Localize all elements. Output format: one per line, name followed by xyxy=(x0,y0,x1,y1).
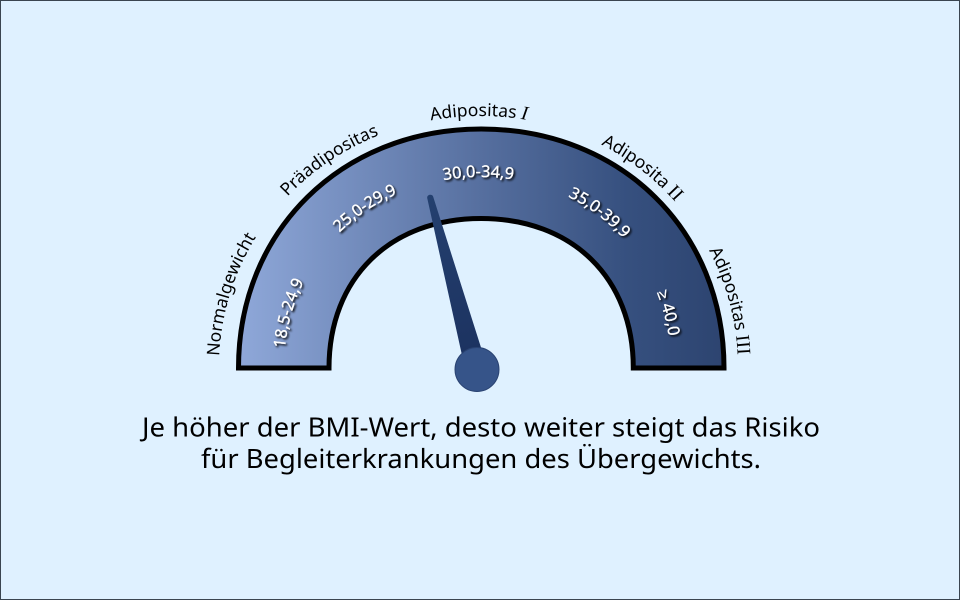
gauge needle xyxy=(427,195,482,353)
range: ≥ 40,0: ≥ 40,0 xyxy=(656,289,682,338)
label: Adiposita II: Adiposita II xyxy=(601,136,684,202)
needle hub xyxy=(455,348,499,392)
range: 30,0-34,9: 30,0-34,9 xyxy=(442,165,516,183)
range: 35,0-39,9: 35,0-39,9 xyxy=(568,187,633,239)
BMI range labels xyxy=(274,165,682,349)
label: Adipositas III: Adipositas III xyxy=(709,249,750,354)
caption line 1: Je höher der BMI-Wert, desto weiter steigt das Risiko xyxy=(139,408,820,444)
caption xyxy=(139,408,820,476)
range: 25,0-29,9: 25,0-29,9 xyxy=(332,184,398,235)
caption line 2: für Begleiterkrankungen des Übergewichts. xyxy=(201,440,761,476)
range: 18,5-24,9: 18,5-24,9 xyxy=(274,278,306,349)
label: Präadipositas: Präadipositas xyxy=(280,127,378,196)
label: Adipositas I: Adipositas I xyxy=(430,103,530,121)
category labels xyxy=(206,103,750,354)
gauge arc xyxy=(238,129,724,368)
label: Normalgewicht: Normalgewicht xyxy=(206,232,256,354)
